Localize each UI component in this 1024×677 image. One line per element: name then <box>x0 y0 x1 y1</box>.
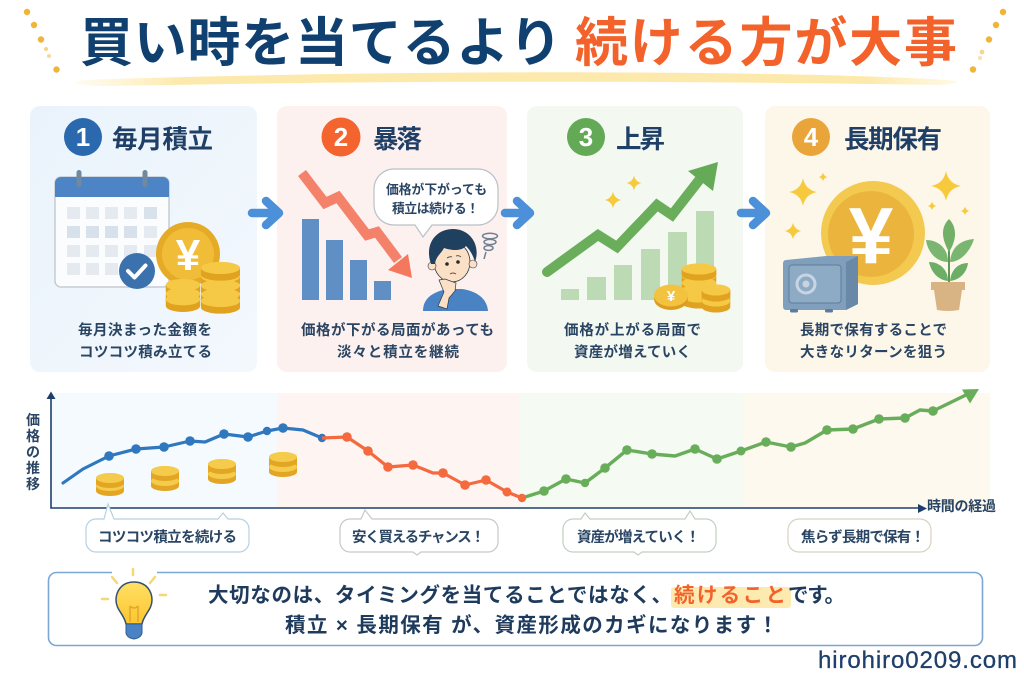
line chart <box>26 389 996 514</box>
dots left <box>24 9 60 73</box>
watermark: hirohiro0209.com <box>818 647 1017 674</box>
icon: large yen coin <box>821 181 925 285</box>
panel: key message <box>48 566 982 646</box>
y axis label: 格 <box>26 428 40 444</box>
message line 2: 積立 × 長期保有 が、資産形成のカギになります！ <box>285 613 778 637</box>
icon: light bulb <box>102 566 166 639</box>
panel: 2 crash <box>277 106 507 372</box>
speech bubble <box>374 169 498 237</box>
caption 4 <box>800 322 947 361</box>
panel: 4 long term <box>765 106 990 372</box>
caption 1 <box>78 321 212 361</box>
callout: 安く買えるチャンス！ <box>340 510 498 555</box>
sparkles <box>604 176 642 208</box>
title: 買い時を当てるより <box>80 14 562 73</box>
heading: 暴落: 暴落 <box>373 126 422 154</box>
y axis label: 移 <box>26 476 40 492</box>
caption 2: 価格が下がる局面があっても <box>301 321 494 339</box>
badge 4 <box>792 118 830 156</box>
y axis label: の <box>26 444 40 460</box>
icon: check badge <box>119 253 155 289</box>
y axis label: 価 <box>26 412 40 428</box>
badge 3: 3 <box>579 122 593 152</box>
icon: worried person <box>423 229 498 311</box>
y axis label: 推 <box>26 460 40 476</box>
bar chart falling <box>302 219 391 300</box>
y axis label <box>26 412 40 492</box>
red line <box>322 432 522 498</box>
sparkles <box>784 171 970 240</box>
x axis label: 時間の経過 <box>927 498 996 514</box>
speech bubble: 価格が下がっても <box>386 182 487 197</box>
icon: calendar <box>55 170 169 287</box>
message line 1: です。 <box>788 584 845 607</box>
message line 1: 大切なのは、タイミングを当てることではなく、 <box>208 583 672 607</box>
arrow 1 <box>252 201 279 225</box>
panel: 1 monthly saving <box>30 106 257 372</box>
icon: yen coin and stacks <box>156 222 240 314</box>
message line 1 <box>208 583 845 607</box>
callout: 焦らず長期で保有！ <box>788 519 931 552</box>
caption 2: 淡々と積立を継続 <box>337 343 460 361</box>
callout: 安く買えるチャンス！: 安く買えるチャンス！ <box>352 528 485 546</box>
icon: potted plant <box>926 219 974 311</box>
arrow rising <box>547 162 718 272</box>
chart phase backgrounds <box>51 393 990 508</box>
title <box>80 14 957 73</box>
arrow 3 <box>741 201 766 225</box>
caption 3: 資産が増えていく <box>574 343 691 361</box>
icon: safe <box>783 256 858 312</box>
badge 4: 4 <box>804 122 819 152</box>
green line <box>518 389 979 502</box>
badge 1 <box>64 118 102 156</box>
arrow 2 <box>505 201 530 225</box>
caption 3 <box>564 321 701 361</box>
arrow falling <box>302 173 412 278</box>
callout: 資産が増えていく！: 資産が増えていく！ <box>577 528 700 546</box>
highlight <box>671 587 791 608</box>
coin stacks <box>96 452 297 496</box>
icon: yen coin and stacks: ¥ <box>176 231 201 280</box>
badge 2 <box>322 118 360 156</box>
badge 1: 1 <box>76 122 90 152</box>
axes <box>46 392 927 513</box>
icon: coin stacks: ¥ <box>667 288 676 305</box>
heading: 上昇: 上昇 <box>616 126 665 154</box>
badge 3 <box>567 118 605 156</box>
panel: 3 rise <box>527 106 743 372</box>
icon: large yen coin: ¥ <box>849 191 894 280</box>
callout: 焦らず長期で保有！: 焦らず長期で保有！ <box>801 528 925 546</box>
title: 続ける方が大事 <box>575 14 957 73</box>
speech bubble: 積立は続ける！ <box>392 201 479 216</box>
caption 2 <box>301 321 494 361</box>
dots right <box>970 9 1006 73</box>
caption 4: 大きなリターンを狙う <box>800 344 947 361</box>
message line 1: 続けること <box>674 584 786 607</box>
heading: 毎月積立: 毎月積立 <box>112 126 213 154</box>
icon: coin stacks <box>654 264 730 312</box>
callout: 資産が増えていく！ <box>563 511 716 555</box>
caption 1: 毎月決まった金額を <box>78 321 212 339</box>
caption 4: 長期で保有することで <box>800 322 947 339</box>
caption 1: コツコツ積み立てる <box>79 343 212 361</box>
title underline <box>74 72 957 86</box>
callout: コツコツ積立を続ける <box>86 504 249 552</box>
heading: 長期保有: 長期保有 <box>844 126 942 154</box>
callout: コツコツ積立を続ける: コツコツ積立を続ける <box>98 528 237 546</box>
bar chart rising <box>561 211 714 300</box>
blue line <box>63 423 326 483</box>
caption 3: 価格が上がる局面で <box>564 321 701 339</box>
badge 2: 2 <box>334 122 348 152</box>
